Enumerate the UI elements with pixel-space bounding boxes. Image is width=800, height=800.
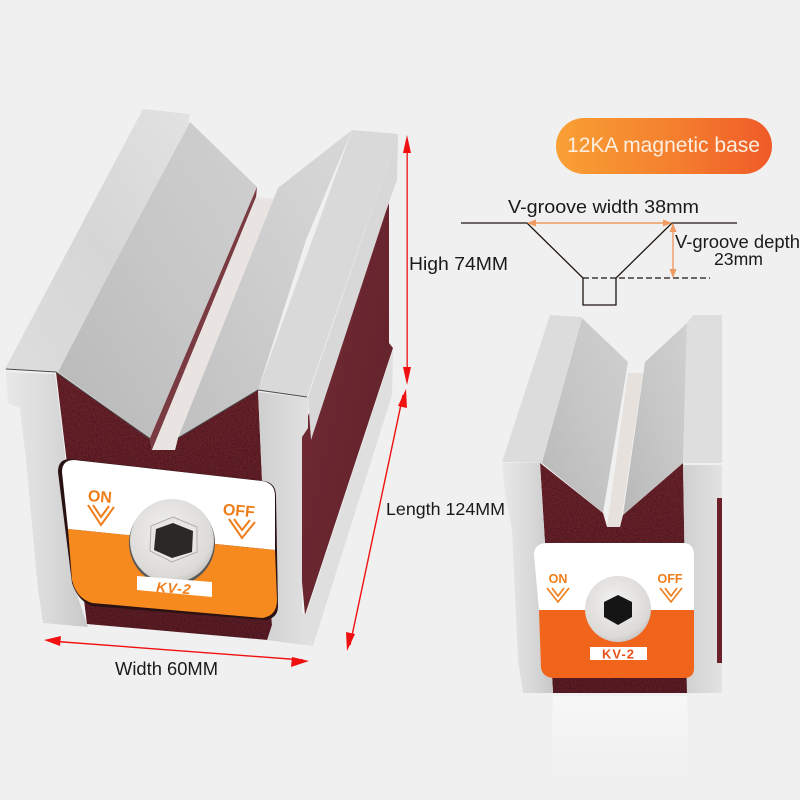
badge: 12KA magnetic base: 12KA magnetic base <box>567 134 760 157</box>
length label: Length 124MM <box>386 499 505 519</box>
groove outline <box>461 223 737 305</box>
arrow: width <box>44 636 309 667</box>
large block: right V slope <box>178 130 352 438</box>
large block: switch plate <box>58 459 278 620</box>
small block: slot <box>607 373 643 527</box>
V-groove dimension diagram <box>461 196 800 305</box>
large block: V-groove slot <box>150 187 276 450</box>
large block: right pillar <box>258 392 313 646</box>
large block: left V slope <box>58 122 257 438</box>
screw <box>129 500 215 586</box>
small block: left slope <box>542 318 628 513</box>
KV-2 label <box>590 647 647 660</box>
large block: steel top edge lines <box>6 369 307 439</box>
depth value: 23mm <box>714 249 763 269</box>
ON chevrons <box>547 588 569 602</box>
small block: switch plate <box>534 543 694 678</box>
depth dimension arrow <box>672 224 674 277</box>
KV-2 label <box>137 576 212 597</box>
large block: front maroon face <box>56 372 272 640</box>
large block: right side edge <box>308 134 398 440</box>
depth label: V-groove depth <box>675 232 800 252</box>
arrow: height <box>403 135 411 385</box>
large block: switch plate: KV-2 <box>156 579 192 597</box>
height label: High 74MM <box>409 254 508 274</box>
width label: V-groove width 38mm <box>508 196 699 217</box>
small block: front maroon face <box>540 463 687 693</box>
small block: right flat top <box>683 315 722 463</box>
width label: Width 60MM <box>115 659 218 679</box>
width dimension arrow <box>528 222 671 224</box>
large block: left flat top <box>5 109 190 372</box>
small block: right slope <box>623 323 687 515</box>
plate orange lower <box>68 529 277 618</box>
arrow: length <box>346 389 407 651</box>
small block: right maroon strip <box>717 498 722 663</box>
large block: left pillar <box>6 372 88 627</box>
small block: switch plate: KV-2 <box>602 646 635 662</box>
small V-block product photo <box>502 315 722 693</box>
large block: right flat top <box>258 130 398 397</box>
large block: lower side rail <box>267 350 393 646</box>
OFF chevrons <box>660 588 682 602</box>
plate white upper <box>62 460 275 550</box>
OFF label: OFF <box>222 502 256 521</box>
OFF label: OFF <box>658 572 683 586</box>
small block: right pillar <box>683 465 722 693</box>
ON chevrons <box>88 505 114 525</box>
large block: right side maroon wall <box>300 203 393 615</box>
small block reflection <box>550 696 690 800</box>
screw <box>585 576 651 642</box>
badge: 12KA magnetic base <box>556 118 772 174</box>
large V-block product photo <box>5 109 398 646</box>
ON label: ON <box>549 572 567 586</box>
OFF chevrons <box>229 519 255 538</box>
small block: left flat top <box>502 315 582 463</box>
small block: left pillar <box>502 463 553 693</box>
ON label: ON <box>87 488 113 507</box>
